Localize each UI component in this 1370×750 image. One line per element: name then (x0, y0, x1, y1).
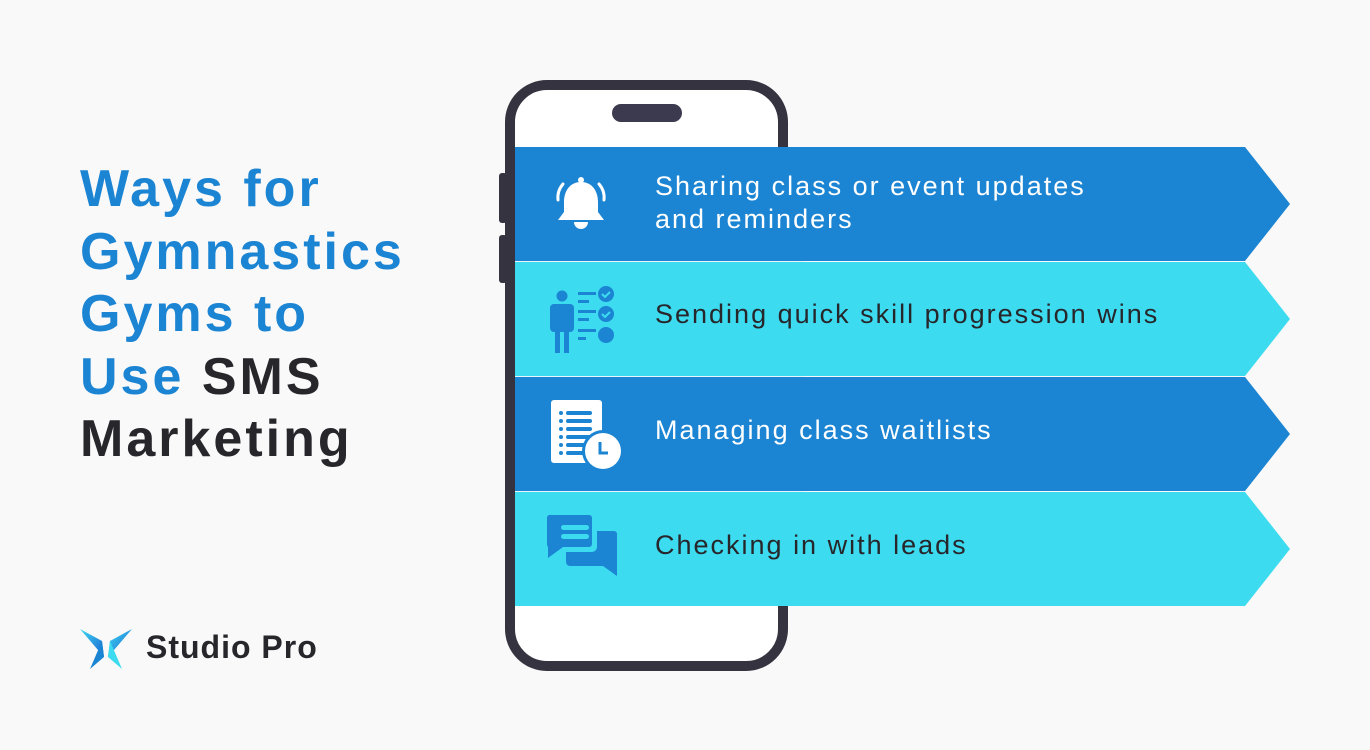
title: Marketing (80, 410, 353, 468)
icon: chat bubbles (547, 515, 617, 576)
logo (80, 629, 318, 669)
logo: Studio Pro (146, 629, 318, 665)
text: band 1 (655, 171, 1086, 234)
title: Gyms to (80, 285, 309, 343)
icon: list clock (551, 400, 624, 472)
text: band 1: and reminders (655, 204, 854, 234)
side buttons (499, 173, 507, 223)
text: band 2: Sending quick skill progression wins (655, 299, 1159, 329)
phone (505, 80, 788, 671)
title (80, 160, 405, 468)
title: Gymnastics (80, 222, 405, 280)
icon: bell (558, 177, 604, 229)
notch (612, 104, 682, 122)
text: band 1: Sharing class or event updates (655, 171, 1086, 201)
title: Use SMS (80, 348, 324, 406)
title: Ways for (80, 160, 322, 218)
text: band 3: Managing class waitlists (655, 415, 993, 445)
text: band 4: Checking in with leads (655, 530, 968, 560)
icon: person checklist (550, 286, 614, 353)
